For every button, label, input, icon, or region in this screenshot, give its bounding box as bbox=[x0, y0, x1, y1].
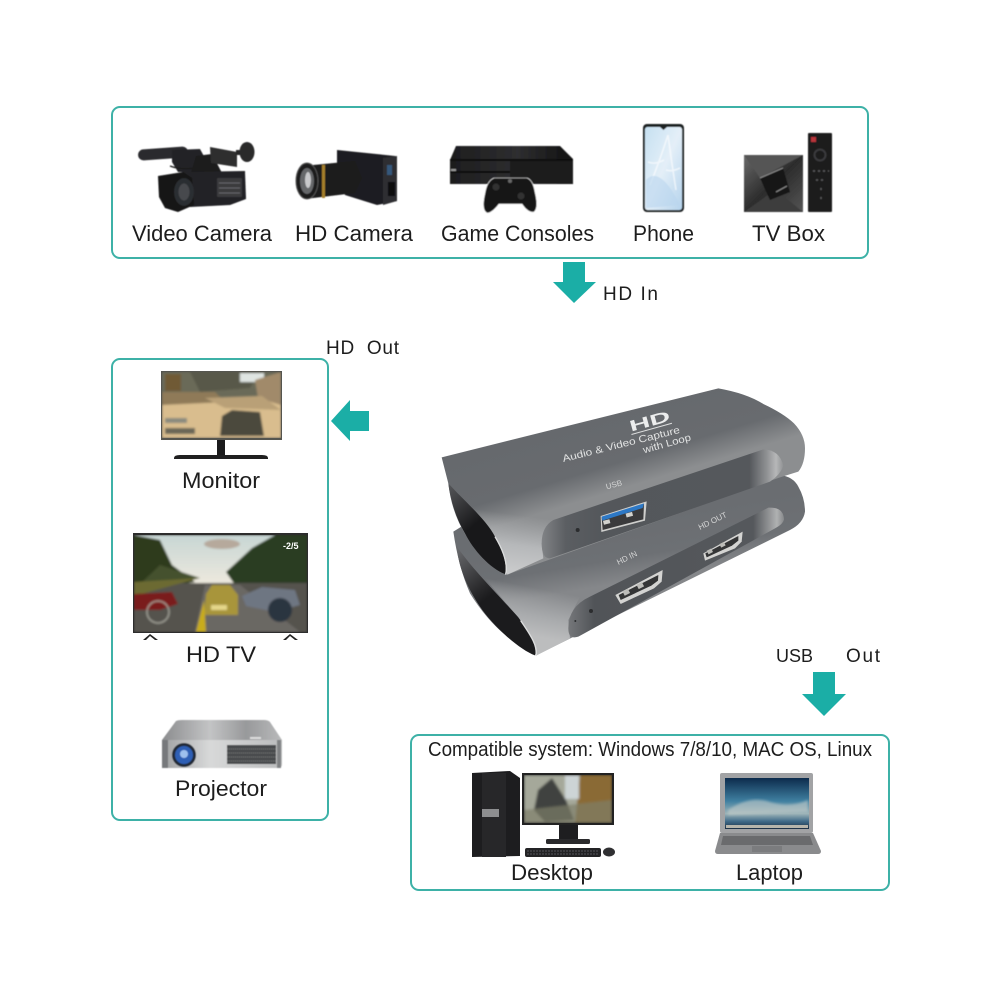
label: HD Out: HD Out bbox=[326, 338, 400, 359]
icon: game console bbox=[450, 146, 573, 213]
capture device bbox=[442, 388, 805, 656]
upper capture unit bbox=[442, 388, 805, 575]
panel: computers bbox=[411, 735, 889, 890]
port: HD OUT bbox=[697, 510, 743, 561]
arrow: HD in bbox=[553, 262, 596, 303]
port: USB bbox=[601, 478, 647, 532]
icon: HD TV: -2/5 bbox=[283, 541, 299, 551]
label: laptop: Laptop bbox=[736, 860, 803, 885]
label: monitor: Monitor bbox=[182, 468, 260, 493]
end cap: lower unit bbox=[457, 546, 535, 655]
icon: HD TV bbox=[133, 533, 308, 640]
label: TV box: TV Box bbox=[752, 221, 825, 246]
arrow: HD out bbox=[331, 400, 369, 441]
icon: phone bbox=[643, 124, 684, 212]
label: projector: Projector bbox=[175, 776, 267, 801]
lower capture unit bbox=[453, 475, 805, 656]
label: desktop: Desktop bbox=[511, 860, 593, 885]
icon: projector bbox=[162, 720, 282, 768]
label: video camera: Video Camera bbox=[132, 221, 273, 246]
port: USB: USB bbox=[605, 478, 623, 491]
icon: laptop bbox=[715, 773, 821, 854]
recess: lower unit ports bbox=[568, 508, 784, 637]
device branding text bbox=[561, 408, 693, 465]
label: USB: USB bbox=[776, 646, 813, 666]
label: game consoles: Game Consoles bbox=[441, 221, 594, 246]
port: HD IN: HD IN bbox=[615, 549, 639, 567]
label: HD In: HD In bbox=[603, 284, 658, 305]
device branding text: with Loop bbox=[641, 432, 693, 457]
device branding text: Audio & Video Capture bbox=[561, 425, 682, 465]
text: compatible systems: Compatible system: Windows 7/8/10, MAC OS, Linux bbox=[428, 739, 872, 761]
device branding text: HD bbox=[628, 408, 672, 436]
icon: video camera bbox=[138, 142, 254, 212]
label: HD TV: HD TV bbox=[186, 642, 256, 667]
recess: upper unit port bbox=[542, 449, 783, 558]
label: Out: Out bbox=[846, 646, 881, 667]
label: HD camera: HD Camera bbox=[295, 221, 414, 246]
panel: input devices bbox=[112, 107, 868, 258]
icon: HD camera bbox=[296, 150, 397, 205]
panel: output displays bbox=[112, 359, 328, 820]
end cap: upper unit bbox=[448, 483, 506, 574]
port: HD OUT: HD OUT bbox=[697, 510, 728, 532]
label: phone: Phone bbox=[633, 221, 694, 246]
arrow: USB out bbox=[802, 672, 846, 716]
icon: desktop computer bbox=[472, 771, 615, 857]
icon: TV box and remote bbox=[744, 133, 832, 212]
icon: monitor bbox=[161, 371, 282, 459]
port: HD IN bbox=[615, 549, 663, 604]
